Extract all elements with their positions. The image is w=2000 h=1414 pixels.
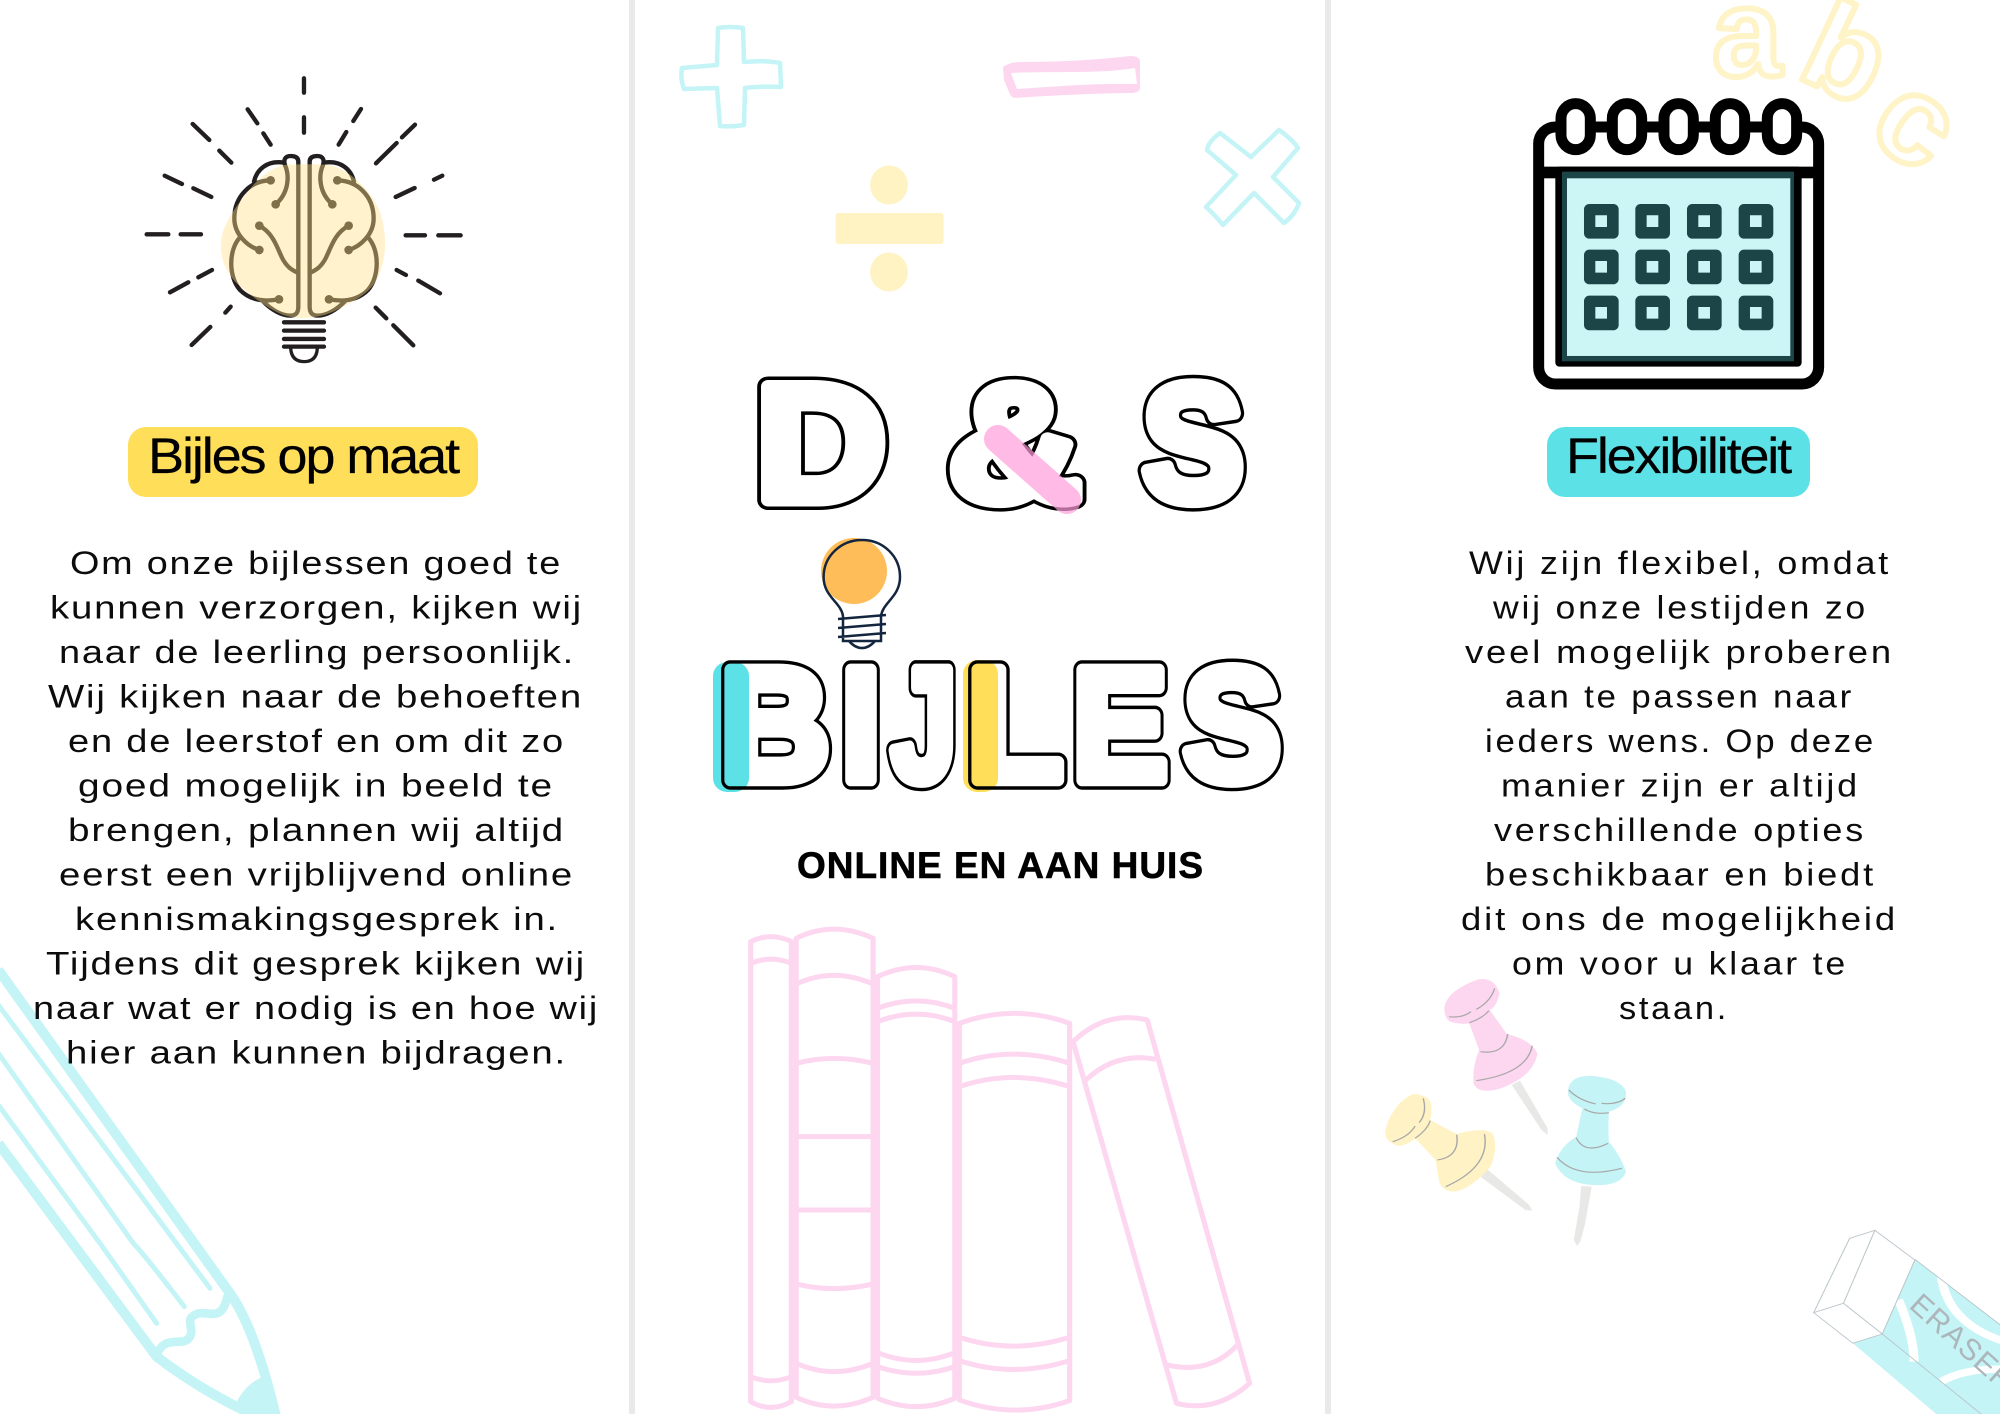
text block: flexibiliteit [1461,545,1898,1026]
heading: flexibiliteit [1547,427,1810,497]
text block: flexibiliteit: veel mogelijk proberen [1465,634,1894,670]
title: D & S [756,350,1244,535]
text block: bijles op maat: en de leerstof en om dit zo [68,723,565,759]
panel: bijles op maat [33,78,599,1070]
title: D & S: S [1142,350,1244,535]
text block: bijles op maat: naar de leerling persoonlijk. [59,634,575,670]
title: BIJLES [713,635,1281,815]
text block: flexibiliteit: om voor u klaar te [1512,946,1848,982]
text block: flexibiliteit: beschikbaar en biedt [1485,856,1876,892]
icon: light bulb [821,538,900,648]
subtitle: ONLINE EN AAN HUIS [797,845,1203,886]
title: D & S: S [1142,350,1244,535]
icon: calendar [1539,104,1819,384]
text block: flexibiliteit: aan te passen naar [1505,678,1854,714]
panel: flexibiliteit [1385,0,2000,1414]
text block: bijles op maat [33,545,599,1070]
text block: bijles op maat: Wij kijken naar de behoeften [48,678,583,714]
text block: bijles op maat: hier aan kunnen bijdragen. [66,1034,567,1070]
decoration: letters abc [1712,0,1986,198]
icon: eraser [1814,1230,2000,1414]
text block: flexibiliteit: staan. [1619,990,1729,1026]
title: D & S: D [756,351,886,535]
title: BIJLES: E [1072,636,1168,815]
decoration: letters abc: c [1849,44,1986,198]
text block: flexibiliteit: ieders wens. Op deze [1485,723,1876,759]
title: BIJLES: B [720,636,830,815]
panel: centre cover [681,27,1299,1410]
title: D & S: & [949,350,1081,535]
text block: flexibiliteit: verschillende opties [1494,812,1866,848]
title: BIJLES: J [891,635,957,814]
title: BIJLES: J [891,635,957,814]
title: BIJLES: L [967,636,1063,814]
text block: bijles op maat: Om onze bijlessen goed te [70,545,562,581]
title: BIJLES: S [1183,636,1281,814]
title: BIJLES: I [841,636,881,815]
heading: flexibiliteit: Flexibiliteit [1566,428,1792,484]
icon: multiply sign [1206,130,1299,225]
icon: minus sign [1003,56,1140,98]
icon: brain light bulb [147,78,461,362]
icon: pencil [0,970,280,1414]
text block: bijles op maat: goed mogelijk in beeld te [78,768,554,804]
text block: bijles op maat: Tijdens dit gesprek kijken wij [46,946,586,982]
icon: push pins [1385,979,1626,1246]
text block: flexibiliteit: Wij zijn flexibel, omdat [1469,545,1891,581]
heading: bijles op maat [128,427,478,497]
heading: bijles op maat: Bijles op maat [148,428,460,484]
title: D & S: D [756,351,886,535]
icon: division sign [836,166,944,292]
title: BIJLES: L [967,636,1063,814]
title: BIJLES: E [1072,636,1168,815]
text block: flexibiliteit: manier zijn er altijd [1501,768,1860,804]
title: BIJLES: B [720,636,830,815]
title: BIJLES: S [1183,636,1281,814]
icon: plus sign [681,27,781,126]
title: BIJLES: I [841,636,881,815]
text block: flexibiliteit: dit ons de mogelijkheid [1461,901,1898,937]
text block: bijles op maat: naar wat er nodig is en hoe wij [33,990,599,1026]
icon: books [751,929,1250,1410]
text block: bijles op maat: kennismakingsgesprek in. [75,901,559,937]
text block: flexibiliteit: wij onze lestijden zo [1492,590,1868,626]
text block: bijles op maat: brengen, plannen wij altijd [68,812,565,848]
text block: bijles op maat: kunnen verzorgen, kijken wij [50,590,583,626]
text block: bijles op maat: eerst een vrijblijvend online [59,856,574,892]
title: D & S: & [949,350,1081,535]
